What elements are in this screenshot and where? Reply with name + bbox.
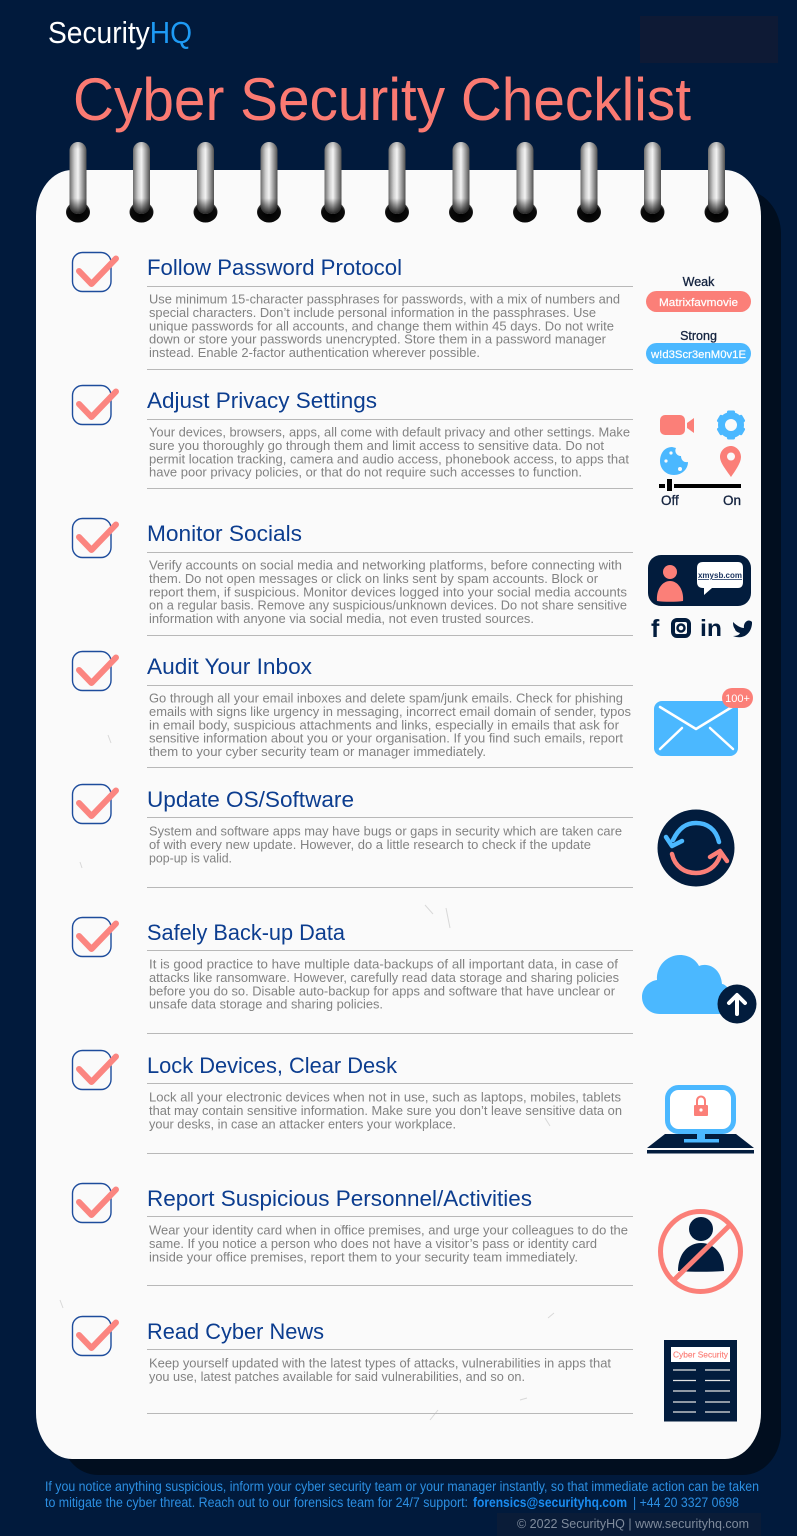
icon: privacy toggles bbox=[659, 410, 746, 508]
icon: social profile and networks bbox=[648, 555, 752, 643]
item 2: Adjust Privacy Settings: permit location tracking, camera and audio access, phonebook access, to apps that bbox=[149, 452, 629, 466]
title: Cyber Security Checklist bbox=[73, 66, 691, 133]
item 6: Safely Back-up Data bbox=[72, 918, 633, 1034]
icon: social profile and networks: f bbox=[651, 615, 660, 643]
icon: cloud upload bbox=[642, 955, 756, 1024]
item 1: Follow Password Protocol: down or store your passwords unencrypted. Store them in a password manager bbox=[149, 332, 607, 346]
item 1: Follow Password Protocol: instead. Enable 2-factor authentication wherever possible. bbox=[149, 345, 480, 360]
item 4: Audit Your Inbox: emails with signs like urgency in messaging, incorrect email domain of sender, typos bbox=[149, 704, 631, 719]
item 5: Update OS/Software: of with every new update. However, do a little research to check if the update bbox=[149, 837, 591, 852]
item 8: Report Suspicious Personnel/Activities: Report Suspicious Personnel/Activities bbox=[147, 1186, 532, 1211]
icon: privacy toggles: Off bbox=[661, 493, 679, 508]
item 2: Adjust Privacy Settings: Your devices, browsers, apps, all come with default privacy and other settings. Make bbox=[149, 424, 630, 440]
item 7: Lock Devices, Clear Desk: that may contain sensitive information. Make sure you don’t leave sensitive data on bbox=[149, 1103, 622, 1118]
panel: notebook page bbox=[36, 170, 761, 1459]
item 4: Audit Your Inbox: Audit Your Inbox bbox=[147, 654, 313, 679]
item 5: Update OS/Software bbox=[72, 784, 633, 888]
icon: email with 100+ badge: 100+ bbox=[725, 693, 750, 705]
item 4: Audit Your Inbox: in email body, suspicious attachments and links, especially in emails that ask for bbox=[149, 718, 620, 732]
item 4: Audit Your Inbox: them to your cyber security team or manager immediately. bbox=[149, 744, 486, 759]
icon: social profile and networks: xmysb.com bbox=[698, 571, 742, 580]
icon: weak and strong passwords: Matrixfavmovie bbox=[659, 297, 738, 309]
item 3: Monitor Socials bbox=[72, 518, 633, 636]
item 2: Adjust Privacy Settings bbox=[72, 386, 633, 488]
icon: update sync arrows bbox=[658, 810, 734, 886]
item 3: Monitor Socials: on a regular basis. Remove any suspicious/unknown devices. Do not share sensitive bbox=[149, 598, 627, 612]
item 1: Follow Password Protocol: unique passwords for all accounts, and change them within 45 days. Do not write bbox=[149, 318, 614, 334]
item 4: Audit Your Inbox: sensitive information about you or your organisation. If you find such emails, report bbox=[149, 730, 623, 746]
notebook shadow bbox=[60, 190, 781, 1475]
icon: weak and strong passwords bbox=[646, 275, 751, 364]
item 8: Report Suspicious Personnel/Activities bbox=[72, 1184, 633, 1286]
icon: cyber security newspaper: Cyber Security bbox=[673, 1350, 729, 1360]
item 5: Update OS/Software: System and software apps may have bugs or gaps in security which are taken care bbox=[149, 824, 622, 838]
item 2: Adjust Privacy Settings: Adjust Privacy Settings bbox=[147, 388, 377, 413]
item 4: Audit Your Inbox: Go through all your email inboxes and delete spam/junk emails. Check for phishing bbox=[149, 690, 623, 706]
footer note: forensics@securityhq.com bbox=[473, 1495, 627, 1510]
item 9: Read Cyber News: you use, latest patches available for said vulnerabilities, and so on. bbox=[149, 1369, 525, 1384]
header dark patch bbox=[640, 16, 778, 63]
item 9: Read Cyber News: Read Cyber News bbox=[147, 1319, 324, 1344]
item 5: Update OS/Software: Update OS/Software bbox=[147, 787, 354, 812]
footer copyright: © 2022 SecurityHQ | www.securityhq.com bbox=[517, 1516, 749, 1531]
item 6: Safely Back-up Data: It is good practice to have multiple data-backups of all important data, in case of bbox=[149, 956, 618, 972]
icon: email with 100+ badge bbox=[654, 688, 753, 756]
item 8: Report Suspicious Personnel/Activities: same. If you notice a person who does not have a visitor’s pass or identity card bbox=[149, 1236, 597, 1251]
footer note: to mitigate the cyber threat. Reach out to our forensics team for 24/7 support: bbox=[45, 1495, 468, 1510]
icon: weak and strong passwords: Strong bbox=[680, 329, 717, 343]
item 7: Lock Devices, Clear Desk: Lock Devices, Clear Desk bbox=[147, 1053, 398, 1078]
item 9: Read Cyber News: Keep yourself updated with the latest types of attacks, vulnerabilities in apps that bbox=[149, 1356, 611, 1370]
item 8: Report Suspicious Personnel/Activities: inside your office premises, report them to your security team immediately. bbox=[149, 1250, 578, 1264]
item 2: Adjust Privacy Settings: have poor privacy policies, or that do not require such accesses to function. bbox=[149, 464, 582, 480]
icon: privacy toggles: On bbox=[723, 493, 741, 508]
footer copyright bbox=[497, 1513, 761, 1536]
item 6: Safely Back-up Data: attacks like ransomware. However, carefully read data storage and sharing policies bbox=[149, 970, 619, 985]
item 3: Monitor Socials: report them, if suspicious. Monitor devices logged into your social media accounts bbox=[149, 584, 628, 600]
item 6: Safely Back-up Data: Safely Back-up Data bbox=[147, 920, 345, 945]
item 1: Follow Password Protocol: Use minimum 15-character passphrases for passwords, with a mix of numbers and bbox=[149, 292, 620, 306]
spiral rings bbox=[66, 142, 728, 222]
item 3: Monitor Socials: information with anyone via social media, not even trusted sources. bbox=[149, 611, 534, 626]
item 7: Lock Devices, Clear Desk: Lock all your electronic devices when not in use, such as laptops, mobiles, tablets bbox=[149, 1090, 621, 1104]
item 7: Lock Devices, Clear Desk: your desks, in case an attacker enters your workplace. bbox=[149, 1116, 456, 1132]
item 1: Follow Password Protocol: special characters. Don’t include personal information in the passphrases. Use bbox=[149, 305, 596, 320]
item 4: Audit Your Inbox bbox=[72, 652, 633, 768]
item 1: Follow Password Protocol: Follow Password Protocol bbox=[147, 255, 402, 280]
item 3: Monitor Socials: Monitor Socials bbox=[147, 521, 302, 546]
footer note: | +44 20 3327 0698 bbox=[633, 1495, 739, 1510]
item 6: Safely Back-up Data: unsafe data storage and sharing policies. bbox=[149, 996, 383, 1012]
footer note bbox=[45, 1479, 759, 1510]
item 8: Report Suspicious Personnel/Activities: Wear your identity card when in office premises, and urge your colleagues to do the bbox=[149, 1222, 628, 1238]
item 3: Monitor Socials: Verify accounts on social media and networking platforms, before connecting with bbox=[149, 558, 622, 572]
item 1: Follow Password Protocol bbox=[72, 252, 633, 370]
item 3: Monitor Socials: them. Do not open messages or click on links sent by spam accounts. Block or bbox=[149, 571, 599, 586]
icon: weak and strong passwords: Weak bbox=[683, 275, 715, 289]
item 5: Update OS/Software: pop-up is valid. bbox=[149, 850, 232, 866]
item 9: Read Cyber News bbox=[72, 1316, 633, 1414]
icon: locked laptop bbox=[647, 1088, 754, 1154]
item 2: Adjust Privacy Settings: sure you thoroughly go through them and limit access to sensitive data. Do not bbox=[149, 438, 604, 453]
icon: no unauthorised person bbox=[660, 1212, 740, 1292]
icon: cyber security newspaper bbox=[664, 1340, 737, 1422]
item 7: Lock Devices, Clear Desk bbox=[72, 1050, 633, 1154]
icon: weak and strong passwords: w!d3Scr3enM0v1E bbox=[650, 349, 746, 361]
item 6: Safely Back-up Data: before you do so. Disable auto-backup for apps and software that have unclear or bbox=[149, 984, 616, 998]
icon: social profile and networks: in bbox=[700, 615, 722, 641]
logo: SecurityHQ: SecurityHQ bbox=[48, 15, 192, 50]
